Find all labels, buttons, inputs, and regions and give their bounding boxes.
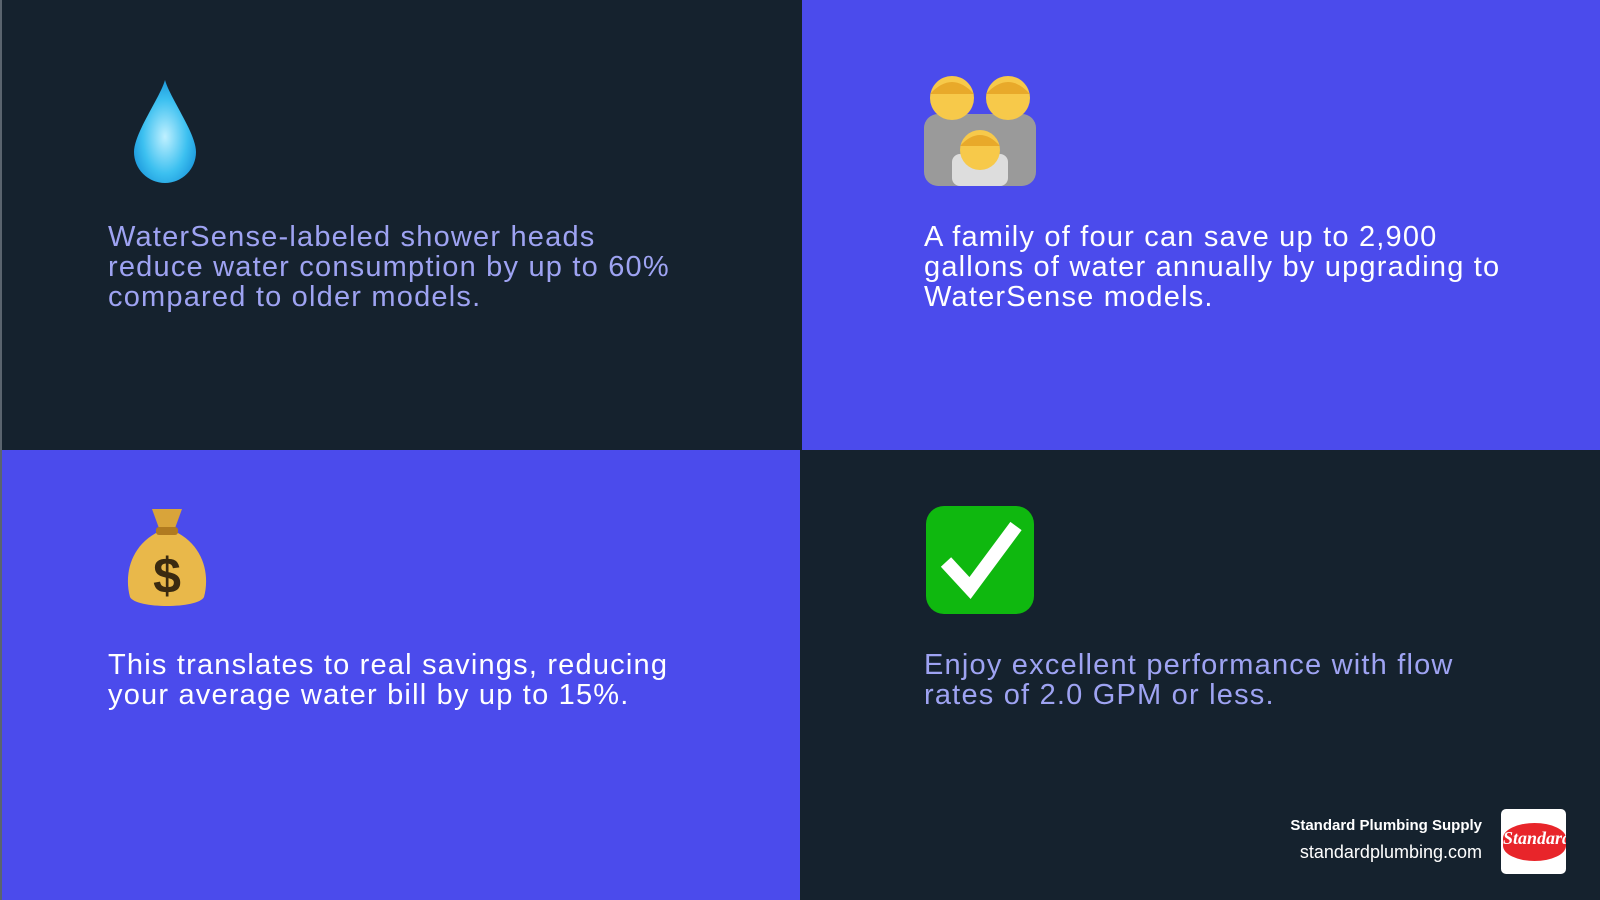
text: performance fact: Enjoy excellent performance with flow — [924, 649, 1454, 681]
text: performance fact — [924, 649, 1454, 711]
icon: check mark — [926, 506, 1034, 614]
footer: brand — [1290, 809, 1566, 874]
text: family savings fact: WaterSense models. — [924, 281, 1214, 313]
brand text: standardplumbing.com — [1300, 842, 1482, 862]
text: performance fact: rates of 2.0 GPM or less. — [924, 679, 1275, 711]
text: family savings fact — [924, 221, 1500, 313]
text: bill savings fact: your average water bill by up to 15%. — [108, 679, 630, 711]
logo — [1501, 809, 1566, 874]
panel: water consumption — [0, 0, 800, 450]
brand text: Standard Plumbing Supply — [1290, 817, 1482, 834]
icon: money bag — [128, 509, 206, 606]
text: water consumption fact: reduce water consumption by up to 60% — [108, 251, 670, 283]
panel: family savings — [802, 0, 1600, 450]
text: bill savings fact: This translates to real savings, reducing — [108, 649, 668, 681]
text: water consumption fact: WaterSense-labeled shower heads — [108, 221, 596, 253]
icon: money bag: $ — [153, 548, 181, 604]
brand text — [1290, 817, 1482, 862]
text: bill savings fact — [108, 649, 668, 711]
text: family savings fact: A family of four can save up to 2,900 — [924, 221, 1438, 253]
icon: family — [924, 76, 1036, 186]
text: family savings fact: gallons of water annually by upgrading to — [924, 251, 1500, 283]
text: water consumption fact — [108, 221, 670, 313]
text: water consumption fact: compared to older models. — [108, 281, 481, 313]
panel: bill savings — [0, 450, 800, 900]
panel: performance — [802, 450, 1600, 900]
icon: water drop — [134, 80, 196, 183]
